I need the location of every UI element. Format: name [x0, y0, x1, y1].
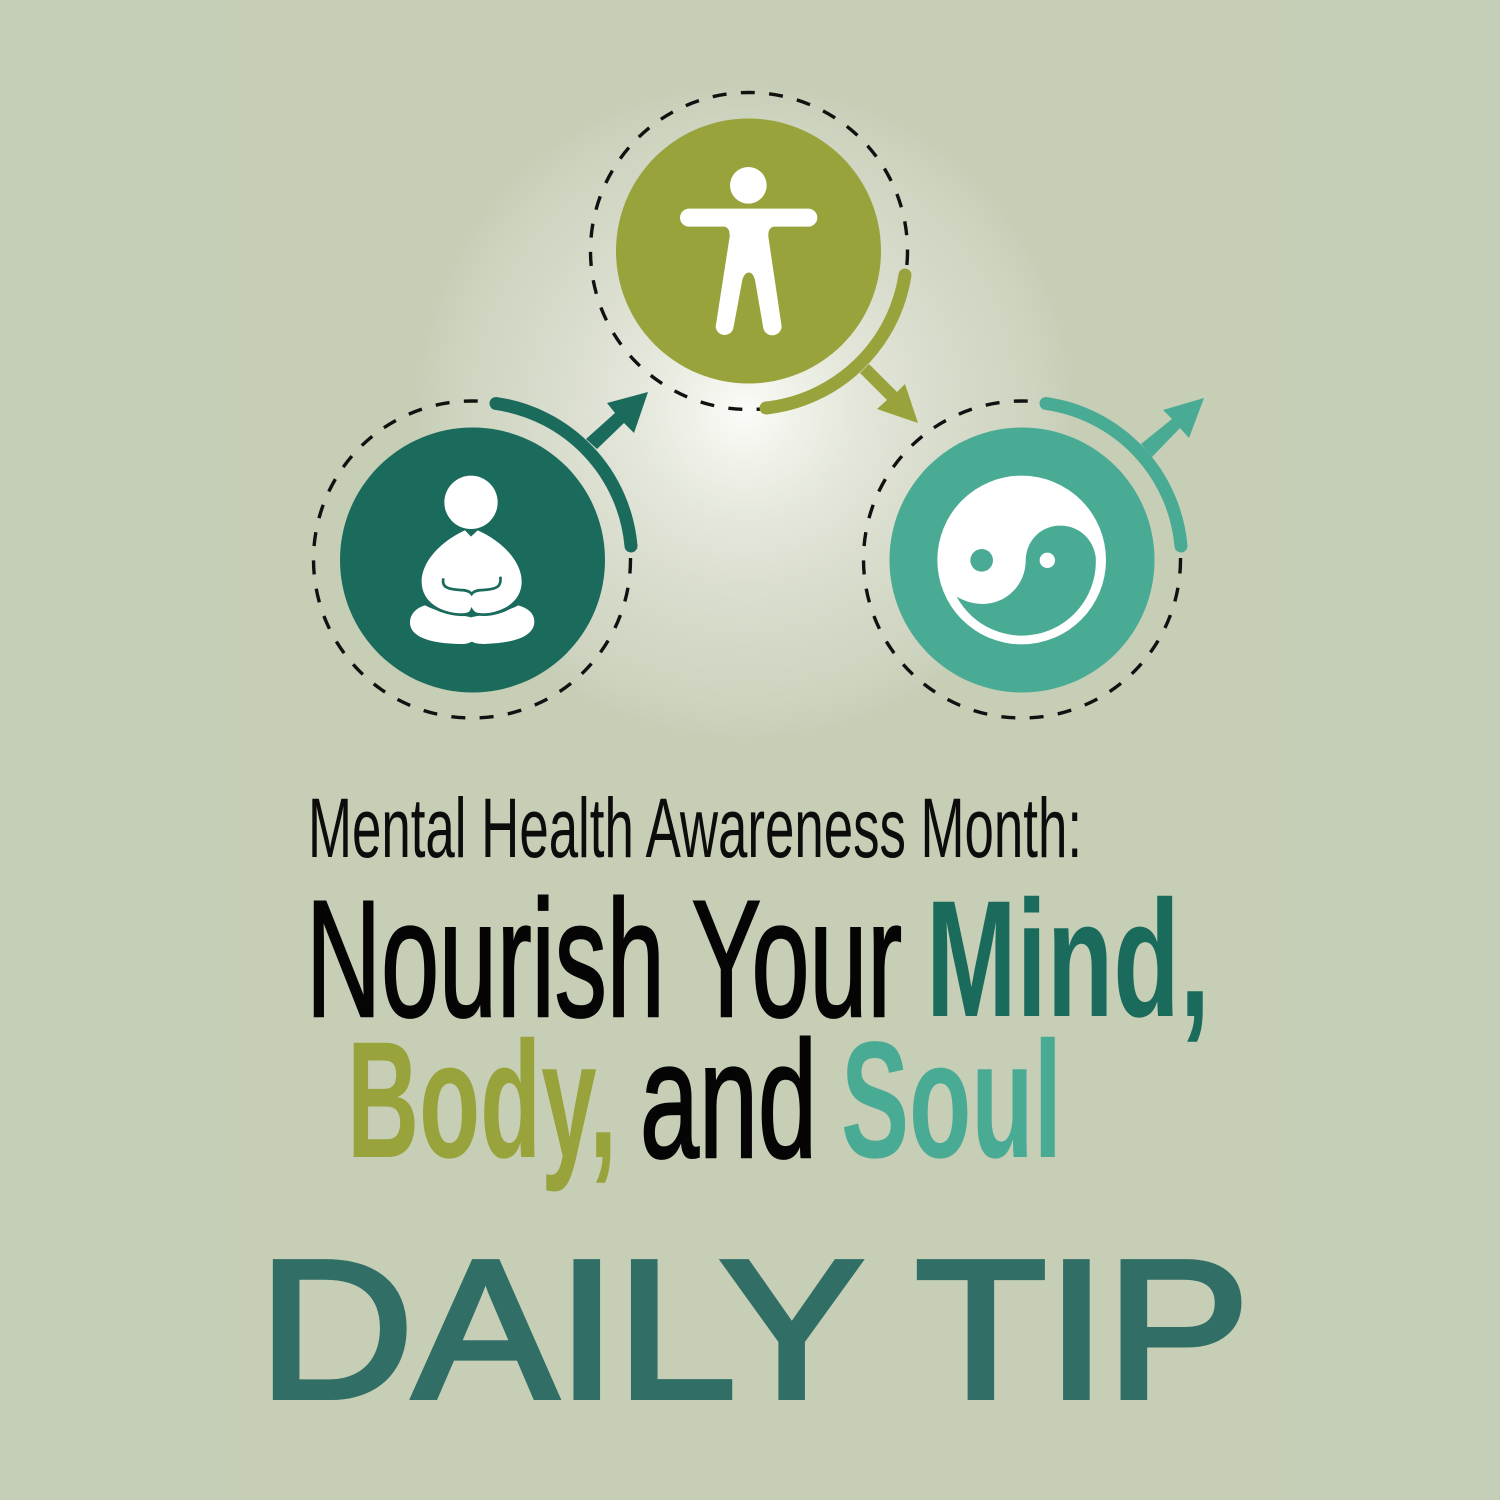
- circle: mind: [340, 428, 605, 692]
- headline: [306, 867, 1210, 1193]
- arrow: body to soul: [766, 275, 918, 423]
- body node: [590, 92, 918, 423]
- headline word: Soul: Soul: [841, 1008, 1062, 1193]
- dashed ring: mind: [314, 401, 630, 718]
- background glow: [417, 84, 1073, 740]
- arrow: mind to body: [496, 392, 648, 546]
- dashed ring: body: [590, 92, 908, 410]
- circle: soul: [890, 428, 1154, 692]
- mind node: [314, 392, 648, 718]
- dashed ring: soul: [864, 401, 1180, 718]
- headline word: Mind: Mind,: [926, 867, 1210, 1052]
- soul node: [864, 398, 1204, 718]
- icon: standing figure: [680, 167, 817, 335]
- diagram: mind, body, soul cycle: [314, 92, 1204, 718]
- circle: body: [616, 118, 881, 384]
- headline word: and: and: [640, 1008, 817, 1193]
- headline word: Body: Body,: [347, 1008, 617, 1193]
- arrow: soul onward: [1046, 398, 1204, 546]
- headline line 1: Nourish Your: Nourish Your: [306, 867, 902, 1052]
- icon: meditating figure: [410, 476, 534, 644]
- icon: yin yang: [937, 476, 1106, 644]
- daily tip label: DAILY TIP: [258, 1220, 1250, 1439]
